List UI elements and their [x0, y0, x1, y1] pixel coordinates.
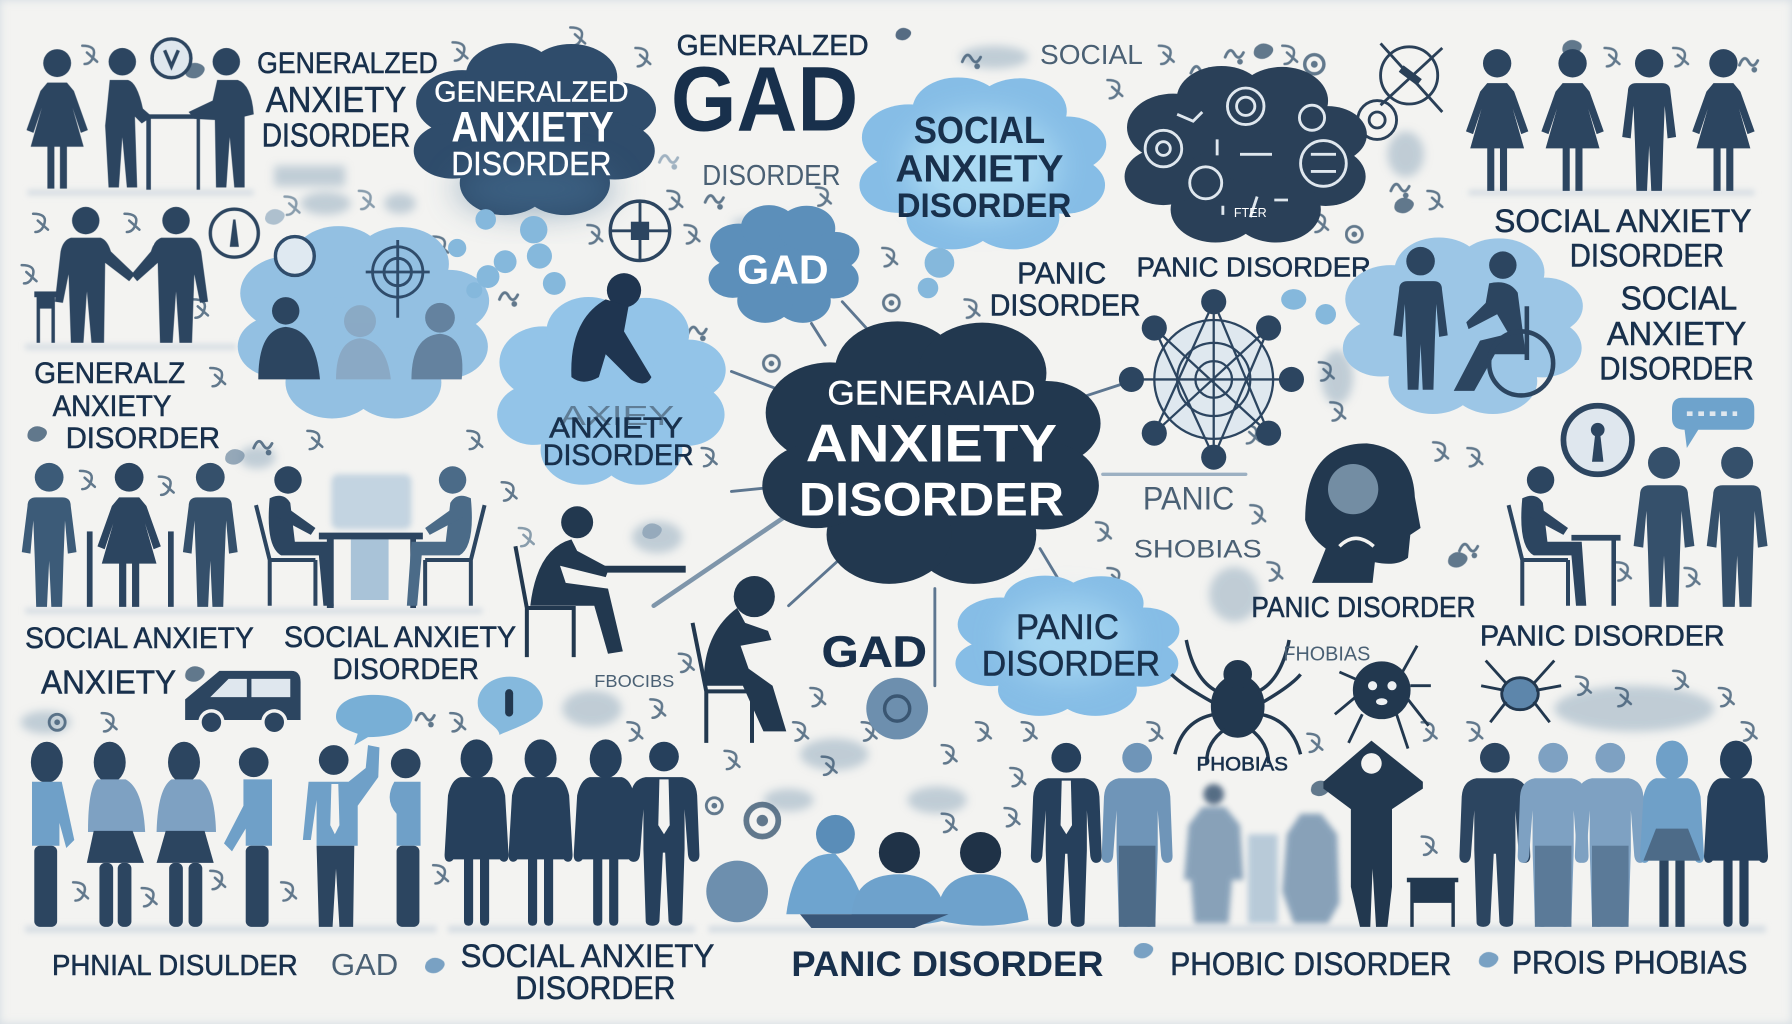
- central cloud: generalized anxiety disorder: [762, 321, 1101, 584]
- label: panic disorder middle: PANIC: [1017, 255, 1106, 290]
- central cloud: generalized anxiety disorder: GENERAIAD: [827, 375, 1035, 413]
- icon: small spider: [1481, 661, 1561, 722]
- heading: GAD top: GENERALZED: [677, 30, 869, 62]
- people: bottom row centre left: [445, 739, 699, 926]
- cloud: GAD: [709, 205, 859, 323]
- cloud: generalized anxiety disorder: [414, 43, 656, 215]
- heading: generalized anxiety disorder top left: ANXIETY: [266, 79, 406, 120]
- label: panic phobias middle: PANIC: [1143, 481, 1234, 517]
- label: panic phobias middle: SHOBIAS: [1134, 536, 1262, 564]
- bottom labels: [52, 938, 1747, 1006]
- heading: generalized anxiety disorder top left: GENERALZED: [257, 47, 438, 80]
- label: panic disorder middle: [990, 255, 1141, 322]
- label: social anxiety disorder second: DISORDER: [333, 653, 479, 686]
- heading: GAD top: DISORDER: [702, 160, 841, 192]
- label: social anxiety left: [25, 622, 254, 702]
- icon: frightened spider: [1335, 646, 1431, 749]
- icon: head with brain: [1305, 443, 1421, 583]
- cloud: generalized anxiety disorder: GENERALZED: [434, 77, 629, 109]
- label: social anxiety left: SOCIAL ANXIETY: [25, 622, 254, 655]
- label: phobias near spider: FHOBIAS: [1283, 643, 1370, 666]
- bottom labels: DISORDER: [515, 970, 675, 1006]
- bottom labels: GAD: [331, 947, 398, 982]
- person: head in hands on chair: [693, 576, 786, 743]
- cloud: social anxiety disorder: SOCIAL: [914, 109, 1045, 151]
- icon: van: [185, 671, 301, 734]
- people: top right group: [1466, 49, 1755, 191]
- label: panic phobias middle: [1134, 481, 1262, 564]
- icon: spider web network: [1119, 289, 1304, 470]
- faded background blobs: [21, 46, 1714, 814]
- people: bottom row left: [31, 742, 421, 927]
- speech bubbles: [336, 677, 543, 745]
- people: bottom row centre right: [1031, 743, 1339, 927]
- label: social anxiety disorder right: DISORDER: [1599, 350, 1754, 386]
- people: second row left pair: [34, 207, 258, 343]
- cloud: three people: [238, 226, 489, 418]
- people: seated group: [706, 815, 1029, 928]
- label: GAD middle: GAD: [822, 628, 927, 676]
- bottom labels: PHOBIC DISORDER: [1170, 946, 1451, 982]
- connector lines from the central cloud: [654, 302, 1246, 686]
- label: social anxiety disorder right: [1494, 203, 1754, 386]
- heading: GAD top: [671, 30, 869, 192]
- bottom labels: PHNIAL DISULDER: [52, 950, 298, 982]
- label: generalized anxiety disorder left: [34, 357, 220, 455]
- label: social anxiety disorder right: SOCIAL: [1621, 281, 1737, 318]
- people: meeting at table: [256, 466, 485, 608]
- cloud: social anxiety disorder: DISORDER: [897, 187, 1072, 225]
- cloud: panic disorder: [955, 576, 1179, 716]
- cloud: panic disorder: PANIC: [1016, 607, 1119, 647]
- bottom labels: PANIC DISORDER: [791, 944, 1103, 984]
- central cloud: generalized anxiety disorder: DISORDER: [799, 473, 1064, 525]
- thought bubbles: [448, 209, 1336, 325]
- label: panic disorder right pair: PANIC DISORDER: [1251, 592, 1475, 624]
- label: generalized anxiety disorder left: DISORDER: [66, 422, 220, 455]
- label: phobias small: FBOCIBS: [594, 671, 674, 691]
- label: social anxiety disorder right: SOCIAL ANXIETY: [1494, 203, 1751, 239]
- bottom labels: PROIS PHOBIAS: [1512, 945, 1747, 981]
- icon: circle badge: [866, 678, 928, 739]
- people: left third row: [22, 463, 238, 607]
- people: bottom row right: [1459, 741, 1768, 927]
- people: top left group: [26, 39, 254, 190]
- label: phobias below spider: PHOBIAS: [1197, 753, 1288, 775]
- icon: target badge: [610, 201, 670, 261]
- cloud: social anxiety disorder: [859, 77, 1106, 249]
- cloud: dark icons: FTER: [1234, 206, 1267, 220]
- central cloud: generalized anxiety disorder: ANXIETY: [806, 415, 1057, 474]
- bottom labels: SOCIAL ANXIETY: [461, 938, 714, 974]
- heading: generalized anxiety disorder top left: DISORDER: [262, 117, 410, 154]
- cloud: anxiety disorder with huddled figure: AXIEY: [560, 400, 674, 431]
- cloud: generalized anxiety disorder: DISORDER: [451, 146, 611, 183]
- label: social anxiety disorder right: DISORDER: [1570, 237, 1724, 273]
- heading: generalized anxiety disorder top left: [257, 47, 438, 154]
- icon: target compass: [1358, 43, 1442, 139]
- cloud: panic disorder: DISORDER: [982, 643, 1160, 683]
- label: social anxiety disorder second: [284, 621, 516, 686]
- icon: keyhole speech badge: [1563, 398, 1754, 474]
- cloud: anxiety disorder with huddled figure: DISORDER: [543, 439, 694, 472]
- label: panic disorder middle: DISORDER: [990, 287, 1141, 322]
- ground shadow lines: [25, 190, 1766, 933]
- people: right third row: [1509, 447, 1768, 607]
- cloud: person and wheelchair user: [1343, 237, 1583, 414]
- icon: large spider: [1171, 640, 1301, 763]
- cloud: social anxiety disorder: ANXIETY: [895, 148, 1063, 190]
- label: panic disorder upper: PANIC DISORDER: [1137, 252, 1371, 283]
- cloud: GAD: GAD: [737, 246, 829, 292]
- cloud: anxiety disorder with huddled figure: [497, 273, 726, 485]
- label: social anxiety disorder right: ANXIETY: [1607, 316, 1746, 353]
- label: social anxiety disorder second: SOCIAL ANXIETY: [284, 621, 516, 654]
- label: social anxiety left: ANXIETY: [41, 665, 176, 702]
- cloud: dark icons: [1125, 66, 1367, 243]
- label: social: SOCIAL: [1040, 39, 1143, 70]
- cloud: anxiety disorder with huddled figure: ANXIETY: [549, 413, 683, 445]
- cloud: generalized anxiety disorder: ANXIETY: [451, 104, 614, 151]
- person: seated at desk: [515, 506, 686, 657]
- label: panic disorder far right: PANIC DISORDER: [1480, 621, 1725, 653]
- heading: GAD top: GAD: [671, 48, 858, 150]
- person: hands on head: [1323, 741, 1458, 927]
- label: generalized anxiety disorder left: GENERALZ: [34, 357, 185, 390]
- label: generalized anxiety disorder left: ANXIETY: [53, 390, 172, 423]
